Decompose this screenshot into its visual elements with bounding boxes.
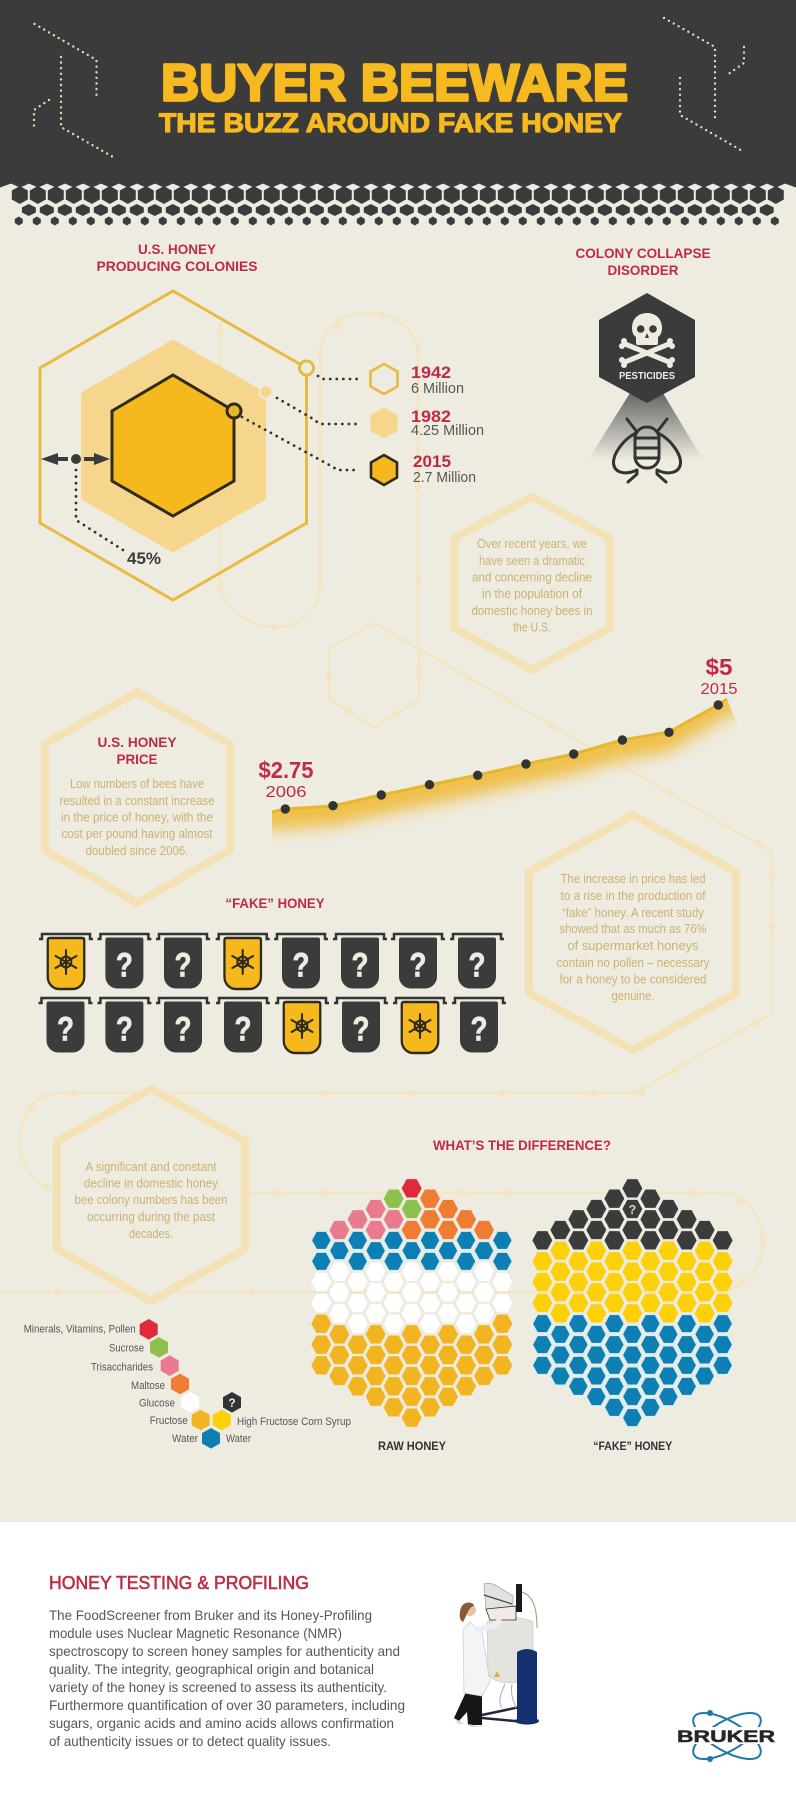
price description: in the price of honey, with the [61, 810, 213, 824]
heading: colonies: U.S. HONEY [138, 241, 217, 257]
logo: Bruker: BRUKER [677, 1727, 775, 1746]
dotted connectors [76, 376, 363, 550]
jar row 2: ? [116, 1010, 133, 1048]
description: module uses Nuclear Magnetic Resonance (NMR) [49, 1625, 342, 1641]
hexagon 1942 [40, 291, 306, 600]
honeycomb row 3 [11, 216, 785, 226]
hexagon 2015 [112, 375, 234, 516]
light beam [588, 393, 703, 460]
price description: resulted in a constant increase [60, 794, 215, 808]
price description: cost per pound having almost [62, 827, 213, 841]
description: sugars, organic acids and amino acids allows confirmation [49, 1715, 394, 1731]
price description: Low numbers of bees have [70, 777, 204, 791]
legend: honey composition [24, 1319, 351, 1449]
honeycomb row 2 [22, 203, 774, 217]
zigzag top [0, 183, 796, 187]
legend: honey composition: Water [172, 1433, 198, 1445]
description: variety of the honey is screened to assess its authenticity. [49, 1679, 387, 1695]
description: of authenticity issues or to detect quality issues. [49, 1733, 331, 1749]
end year: 2015 [700, 681, 738, 698]
45% arrows [41, 453, 110, 465]
hex markers [300, 361, 314, 375]
jar row 1: ? [174, 946, 192, 984]
subtitle: THE BUZZ AROUND FAKE HONEY [159, 108, 622, 138]
machine [482, 1583, 539, 1724]
legend: honey composition: Maltose [131, 1380, 165, 1392]
jar row 2 [38, 998, 506, 1053]
start year: 2006 [266, 784, 307, 801]
panel: honey price text [45, 692, 230, 903]
legend: honey composition: ? [228, 1396, 236, 1410]
logo: Bruker [676, 1704, 778, 1768]
pesticide hexagon [599, 293, 695, 403]
jar row 1: ? [116, 946, 133, 984]
panel: fake honey jars [38, 895, 506, 1053]
callout: colony decline: decline in domestic honey [84, 1177, 219, 1191]
legend: honey composition: Sucrose [109, 1343, 144, 1355]
start value: $2.75 [258, 757, 314, 783]
chart: raw honey cells [311, 1179, 512, 1427]
raw honey label: RAW HONEY [378, 1441, 446, 1453]
jar row 1: ? [468, 946, 486, 984]
callout: recent years decline: Over recent years, we [477, 537, 587, 551]
pesticides label: PESTICIDES [619, 371, 675, 382]
legend 1982: 1982 [411, 407, 451, 426]
scientist [454, 1603, 501, 1727]
panel: honey testing and profiling [49, 1572, 405, 1749]
jar row 1 [39, 934, 504, 989]
legend: honey composition: High Fructose Corn Syrup [237, 1416, 351, 1428]
heading: colonies: PRODUCING COLONIES [96, 258, 258, 274]
header band [0, 0, 796, 191]
callout: fake honey price increase [529, 815, 736, 1050]
jar row 1: ? [410, 946, 426, 984]
heading: honey price: PRICE [116, 751, 158, 767]
illustration: scientist with NMR machine [454, 1583, 539, 1727]
callout: recent years decline [454, 497, 610, 670]
legend 1982 [370, 407, 484, 439]
legend: honey composition: Water [226, 1433, 251, 1445]
heading: colony collapse: DISORDER [608, 262, 678, 278]
icon: skull and crossbones [619, 313, 675, 368]
chart: fake honey cells [532, 1179, 733, 1427]
legend 2015: 2.7 Million [413, 469, 476, 486]
callout: colony decline: A significant and constant [86, 1160, 217, 1174]
header zigzag edge [0, 183, 796, 227]
header [0, 0, 796, 227]
jar row 1: ? [352, 946, 368, 984]
jar row 1: ? [292, 946, 310, 984]
panel: honey producing colonies [40, 241, 484, 600]
description: The FoodScreener from Bruker and its Honey-Profiling [49, 1607, 372, 1623]
fake honey label: “FAKE” HONEY [593, 1441, 672, 1453]
jar row 2: ? [234, 1010, 252, 1048]
heading: honey price: U.S. HONEY [98, 734, 177, 750]
legend 1942: 1942 [411, 363, 451, 382]
chart fade [272, 699, 737, 842]
jar row 2: ? [352, 1010, 370, 1048]
callout: recent years decline: and concerning decline [472, 570, 592, 584]
footer white background [0, 1522, 796, 1796]
price description: doubled since 2006. [86, 844, 188, 858]
callout: colony decline: bee colony numbers has been [74, 1193, 228, 1207]
panel: colony collapse disorder [576, 245, 710, 482]
jar row 2: ? [174, 1010, 192, 1048]
jar row 2: ? [470, 1010, 488, 1048]
heading: colony collapse: COLONY COLLAPSE [576, 245, 710, 261]
description: spectroscopy to screen honey samples for authenticity and [49, 1643, 400, 1659]
dotted decorations [34, 18, 744, 157]
legend: honey composition: Minerals, Vitamins, Pollen [24, 1324, 136, 1336]
heading: fake honey: “FAKE” HONEY [226, 895, 325, 911]
title: BUYER BEEWARE [161, 54, 628, 112]
callout: colony decline: occurring during the past [87, 1210, 215, 1224]
heading: honey testing: HONEY TESTING & PROFILING [49, 1572, 309, 1593]
legend 1942: 6 Million [411, 380, 464, 397]
line chart: honey price [230, 654, 780, 832]
chart: fake honey cells: ? [628, 1203, 636, 1217]
chart line [272, 699, 727, 812]
end value: $5 [706, 654, 733, 680]
honeycomb row 1 [11, 185, 785, 205]
icon: bee [613, 419, 681, 482]
callout: fake honey price increase: for a honey to be considered [560, 972, 707, 986]
callout: fake honey price increase: to a rise in the production of [560, 889, 706, 903]
callout: fake honey price increase: of supermarket honeys [568, 939, 698, 953]
45% label: 45% [127, 549, 161, 568]
description: Furthermore quantification of over 30 parameters, including [49, 1697, 405, 1713]
callout: fake honey price increase: showed that as much as 76% [560, 922, 706, 936]
callout: fake honey price increase: “fake” honey. A recent study [562, 906, 705, 920]
callout: colony decline: decades. [129, 1227, 173, 1241]
callout: recent years decline: in the population of [482, 587, 582, 601]
legend: honey composition: Glucose [139, 1398, 175, 1410]
legend 2015: 2015 [413, 452, 451, 471]
jar row 2: ? [57, 1010, 74, 1048]
description: quality. The integrity, geographical origin and botanical [49, 1661, 374, 1677]
heading: what's the difference: WHAT’S THE DIFFERENCE? [433, 1137, 611, 1153]
flow path with arrows [0, 311, 776, 1296]
legend 1942 [370, 363, 464, 397]
callout: fake honey price increase: The increase in price has led [560, 872, 706, 886]
legend 1982: 4.25 Million [411, 422, 484, 439]
callout: colony decline [57, 1089, 245, 1301]
legend: honey composition: Trisaccharides [91, 1362, 153, 1374]
legend: honey composition: Fructose [150, 1415, 188, 1427]
callout: recent years decline: the U.S. [513, 620, 551, 634]
callout: recent years decline: domestic honey bees in [472, 604, 593, 618]
chart points [281, 700, 723, 814]
hexagon 1982 [85, 344, 262, 548]
legend 2015 [371, 452, 476, 486]
callout: fake honey price increase: contain no pollen – necessary [556, 956, 710, 970]
callout: recent years decline: have seen a dramatic [479, 554, 585, 568]
callout: fake honey price increase: genuine. [612, 989, 654, 1003]
